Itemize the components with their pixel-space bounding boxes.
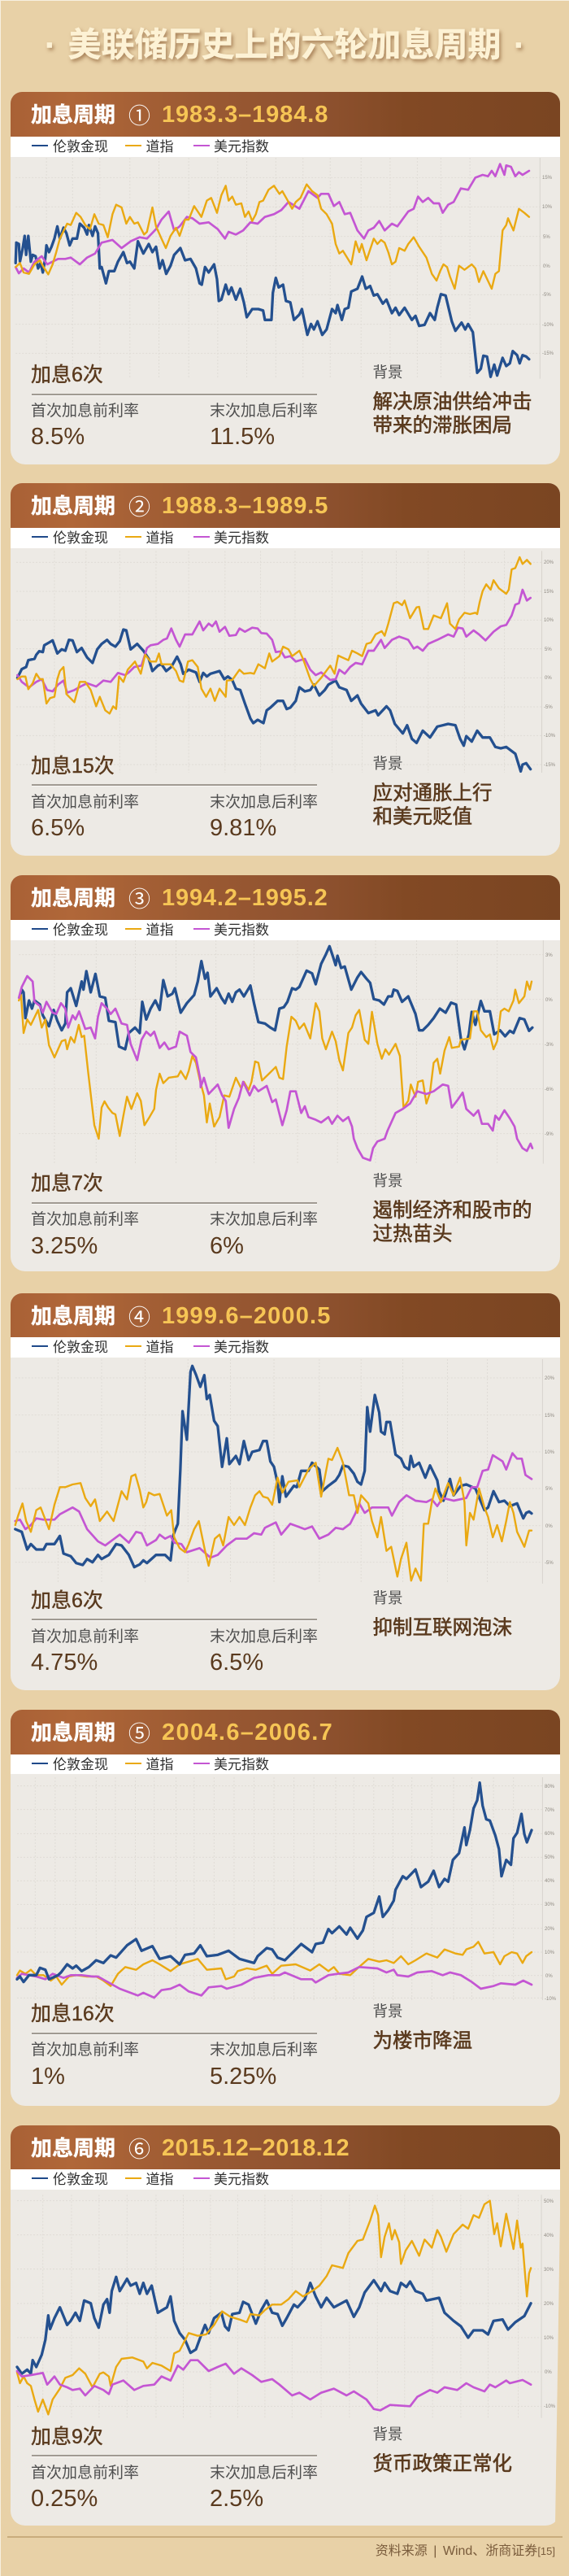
line chart: cycle 2 [16,551,556,773]
line chart: cycle 5: 30% [545,1903,555,1907]
panel header: cycle 2: 加息周期 [31,494,115,518]
panel header: cycle 5: 2004.6–2006.7 [162,1720,333,1746]
panel: cycle 2: 6.5% [31,815,85,841]
rate before first hike [31,794,139,841]
legend: 美元指数 [214,1757,269,1772]
legend [11,528,560,548]
panel header: cycle 3: 1994.2–1995.2 [162,885,328,911]
panel header: cycle 3: 加息周期 [31,886,115,910]
panel: cycle 6: 2.5% [210,2486,263,2512]
panel header: cycle 1: ① [128,98,150,130]
background label: 背景 [372,1589,403,1606]
panel header: cycle 4: 1999.6–2000.5 [162,1303,331,1329]
panel: cycle 6 [11,2125,560,2526]
rate before first hike: 首次加息前利率 [31,403,139,420]
background text [372,390,532,436]
hike count: 加息6次 [31,364,103,386]
panel: cycle 3 [11,875,560,1271]
legend: 伦敦金现 [53,1757,108,1772]
line chart: cycle 4 [14,1359,555,1584]
background text: 解决原油供给冲击 [372,390,532,413]
rate before first hike: 首次加息前利率 [31,1211,139,1228]
line chart: cycle 3: 0% [545,998,553,1003]
line chart: cycle 1: 10% [542,205,553,210]
panel header: cycle 1: 加息周期 [31,102,115,127]
line chart: cycle 5: 70% [545,1808,555,1813]
background label: 背景 [372,755,403,772]
panel header: cycle 5: 加息周期 [31,1720,115,1745]
background text: 货币政策正常化 [372,2453,512,2474]
rate before first hike [31,2465,139,2512]
panel header: cycle 3: ③ [128,882,150,913]
background label: 背景 [372,364,403,381]
legend: 美元指数 [214,1340,269,1355]
legend: 美元指数 [214,2172,269,2187]
panel header: cycle 5 [11,1710,560,1754]
line chart: cycle 2: 20% [544,560,554,565]
panel header: cycle 1: 1983.3–1984.8 [162,102,328,128]
panel header: cycle 2: 1988.3–1989.5 [162,493,328,519]
rate after last hike [210,402,318,450]
legend [11,2169,560,2190]
panel: cycle 4 [11,1293,560,1690]
rate after last hike: 末次加息后利率 [210,2465,318,2482]
legend: 美元指数 [214,530,269,546]
panel header: cycle 6: 2015.12–2018.12 [162,2135,350,2161]
line chart: cycle 1 [15,158,554,379]
line chart: cycle 5: 20% [545,1927,555,1932]
background text: 应对通胀上行 [372,782,493,804]
line chart: cycle 4: 5% [545,1487,553,1492]
rate before first hike: 首次加息前利率 [31,794,139,811]
title: 美联储历史上的六轮加息周期 [68,26,501,63]
panel: cycle 1: 11.5% [210,424,275,450]
line chart: cycle 3: -3% [545,1043,554,1048]
line chart: cycle 5: 50% [545,1855,555,1860]
panel header: cycle 4: ④ [128,1300,150,1332]
panel: cycle 5 [11,1710,560,2106]
background label: 背景 [372,2426,403,2443]
legend: 美元指数 [214,139,269,155]
panel header: cycle 2: ② [128,490,150,521]
line chart: cycle 5 [15,1777,557,2000]
line chart: cycle 2: 10% [544,618,554,623]
panel header: cycle 5: ⑤ [128,1716,150,1748]
legend [11,920,560,940]
panel: cycle 3: 6% [210,1233,244,1259]
line chart: cycle 1: 15% [542,176,553,181]
legend: 道指 [146,1340,174,1355]
panel: cycle 5: 5.25% [210,2064,276,2090]
panel: cycle 2 [11,483,560,856]
title: · [45,26,56,63]
line chart: cycle 5: 10% [545,1951,555,1955]
legend: 伦敦金现 [53,2172,108,2187]
legend: 伦敦金现 [53,1340,108,1355]
rate after last hike [210,794,318,841]
panel: cycle 5: 1% [31,2064,65,2090]
line chart: cycle 4: -5% [545,1561,554,1566]
legend [11,137,560,157]
line chart: cycle 2: -15% [544,763,556,768]
line chart: cycle 3: 3% [545,953,553,958]
rate before first hike [31,1628,139,1676]
rate after last hike [210,1210,318,1259]
panel header: cycle 6: 加息周期 [31,2136,115,2160]
line chart: cycle 2: -10% [544,734,556,739]
rate before first hike: 首次加息前利率 [31,1628,139,1645]
line chart: cycle 5: 40% [545,1879,555,1884]
rate before first hike: 首次加息前利率 [31,2042,139,2059]
line chart: cycle 6: 20% [544,2302,554,2307]
panel: cycle 1: 8.5% [31,424,85,450]
line chart: cycle 1: 5% [543,235,550,240]
panel: cycle 3: 3.25% [31,1233,98,1259]
panel header: cycle 1 [11,92,560,137]
rate after last hike: 末次加息后利率 [210,403,318,420]
background text: 和美元贬值 [372,805,472,828]
panel header: cycle 3 [11,875,560,920]
line chart: cycle 6: 50% [544,2199,554,2204]
line chart: cycle 6 [15,2195,556,2417]
background text: 过热苗头 [372,1223,452,1244]
hike count: 加息9次 [31,2426,103,2448]
legend: 伦敦金现 [53,139,108,155]
hike count: 加息16次 [31,2003,115,2025]
legend [11,1754,560,1774]
rate after last hike: 末次加息后利率 [210,1211,318,1228]
line chart: cycle 1: -5% [542,293,551,298]
line chart: cycle 3: -9% [545,1132,554,1137]
panel: cycle 1 [11,92,560,464]
rate after last hike [210,2465,318,2512]
panel header: cycle 6: ⑥ [128,2132,150,2164]
panel header: cycle 4: 加息周期 [31,1304,115,1328]
background label: 背景 [372,2003,403,2020]
background text: 遏制经济和股市的 [372,1199,532,1222]
background text [372,1199,532,1244]
rate after last hike: 末次加息后利率 [210,2042,318,2059]
rate after last hike: 末次加息后利率 [210,794,318,811]
hike count: 加息7次 [31,1172,103,1195]
legend: 道指 [146,530,174,546]
legend: 道指 [146,922,174,938]
panel: cycle 4: 4.75% [31,1650,98,1676]
rate before first hike [31,402,139,450]
source footer: 资料来源 | Wind、浙商证券[15] [376,2544,555,2558]
line chart: cycle 4: 0% [545,1524,553,1529]
legend: 道指 [146,1757,174,1772]
legend [11,1337,560,1358]
line chart: cycle 1: 0% [543,264,550,269]
line chart: cycle 6: -10% [544,2404,556,2409]
background label: 背景 [372,1172,403,1189]
hike count: 加息6次 [31,1589,103,1612]
background text [372,782,493,828]
legend: 道指 [146,2172,174,2187]
line chart: cycle 3: -6% [545,1087,554,1092]
title: · [514,26,525,63]
panel header: cycle 4 [11,1293,560,1337]
line chart: cycle 6: 40% [544,2234,554,2238]
legend: 伦敦金现 [53,530,108,546]
line chart: cycle 2: -5% [544,705,553,710]
panel: cycle 6: 0.25% [31,2486,98,2512]
line chart: cycle 4: 10% [545,1450,555,1455]
line chart: cycle 6: 0% [545,2370,552,2375]
line chart: cycle 1: -10% [542,323,554,328]
line chart: cycle 5: 0% [545,1974,553,1979]
background text: 带来的滞胀困局 [372,415,512,436]
line chart: cycle 2: 15% [544,590,554,595]
legend: 伦敦金现 [53,922,108,938]
rate after last hike: 末次加息后利率 [210,1628,318,1645]
panel: cycle 4: 6.5% [210,1650,263,1676]
legend: 道指 [146,139,174,155]
panel header: cycle 2 [11,483,560,528]
line chart: cycle 2: 5% [545,647,552,652]
line chart: cycle 5: 60% [545,1832,555,1837]
line chart: cycle 3 [18,940,554,1163]
background text: 抑制互联网泡沫 [372,1617,512,1638]
line chart: cycle 6: 10% [544,2336,554,2341]
line chart: cycle 5: 80% [545,1785,555,1789]
rate after last hike [210,1628,318,1676]
legend: 美元指数 [214,922,269,938]
rate after last hike [210,2042,318,2090]
rate before first hike [31,2042,139,2090]
line chart: cycle 4: 15% [545,1414,555,1419]
rate before first hike: 首次加息前利率 [31,2465,139,2482]
panel header: cycle 6 [11,2125,560,2169]
line chart: cycle 2: 0% [545,676,552,681]
line chart: cycle 6: 30% [544,2268,554,2273]
background text: 为楼市降温 [372,2030,472,2051]
panel: cycle 2: 9.81% [210,815,276,841]
rate before first hike [31,1210,139,1259]
hike count: 加息15次 [31,755,115,778]
line chart: cycle 4: 20% [545,1376,555,1381]
line chart: cycle 1: -15% [542,351,554,356]
